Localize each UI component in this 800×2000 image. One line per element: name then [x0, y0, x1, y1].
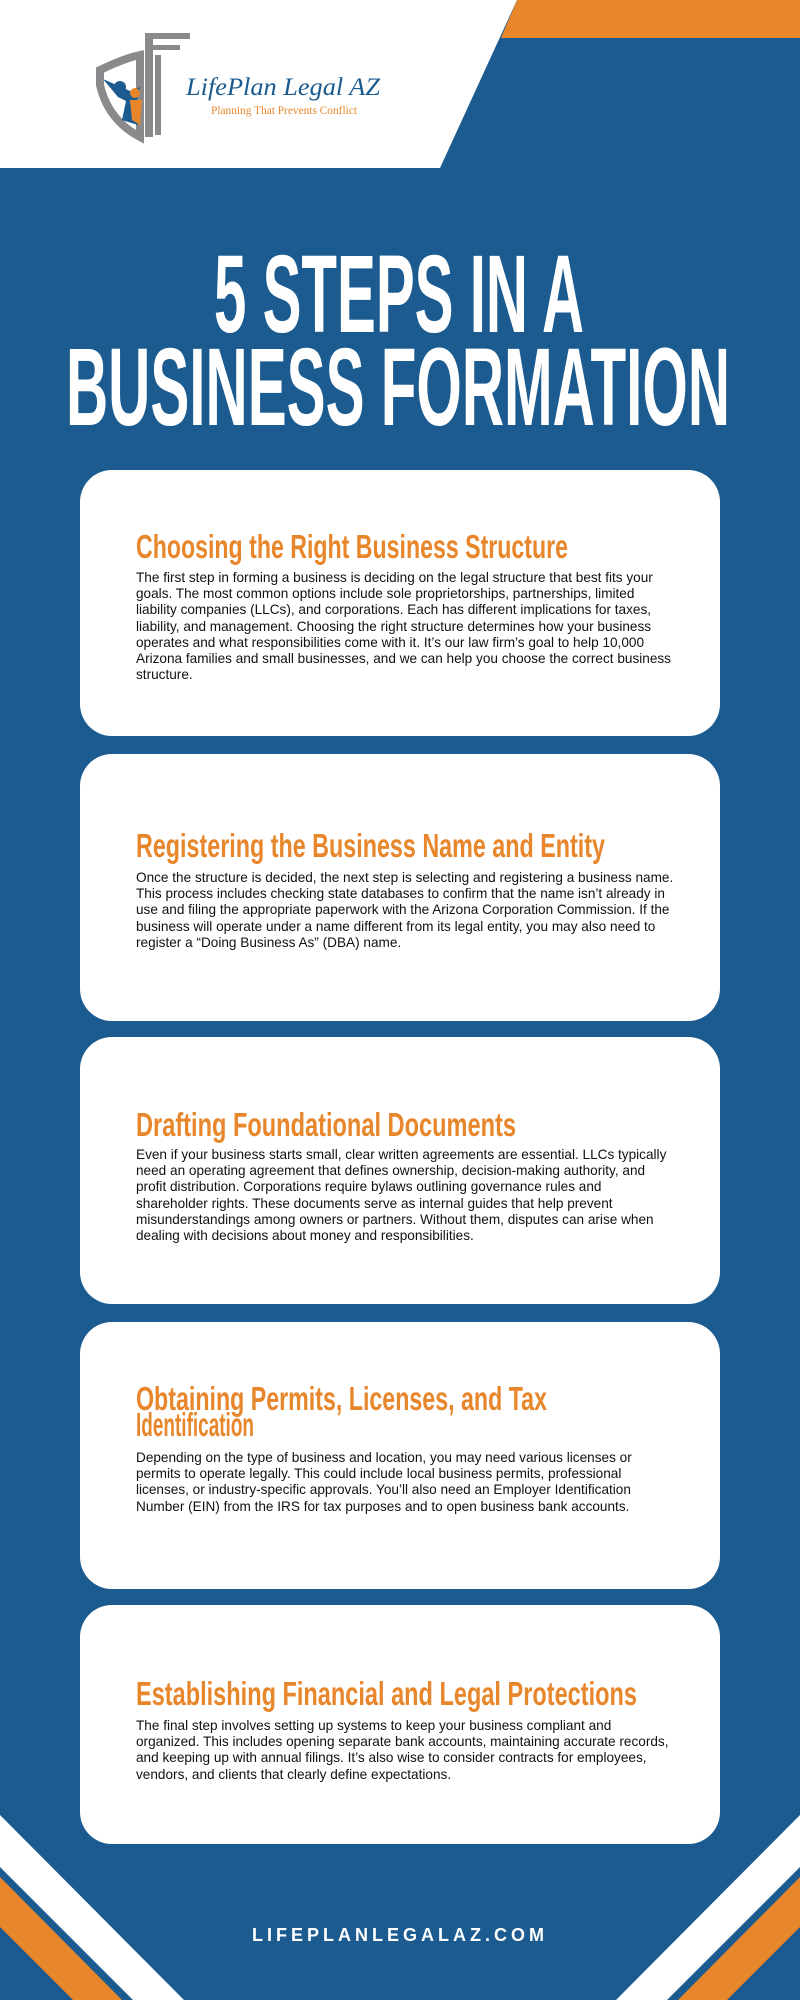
- text 1: The first step in forming a business is deciding on the legal structure that best fits your goals. The most common options include sole proprietorships, partnerships, limited liability companies (LLCs), and corporations. Each has different implications for taxes, liability, and management. Choosing the right structure determines how your business operates and what responsibilities come with it. It’s our law firm’s goal to help 10,000 Arizona families and small businesses, and we can help you choose the correct business structure.: [136, 570, 671, 682]
- panel: step 4: [80, 1322, 720, 1589]
- logo: Planning That Prevents Conflict: [211, 105, 358, 117]
- footer url: LIFEPLANLEGALAZ.COM: [252, 1925, 548, 1945]
- logo text: LifePlan Legal AZ: [185, 74, 381, 101]
- panel: step 5: [80, 1605, 720, 1844]
- heading 4: Identification: [136, 1406, 254, 1443]
- panel: step 1: [80, 470, 720, 736]
- panel: step 3: [80, 1037, 720, 1304]
- heading 4: [136, 1380, 547, 1443]
- text 4: Depending on the type of business and location, you may need various licenses or permits to operate legally. This could include local business permits, professional licenses, or industry-specific approvals. You’ll also need an Employer Identification Number (EIN) from the IRS for tax purposes and to open business bank accounts.: [136, 1450, 632, 1514]
- logo: [96, 33, 381, 144]
- heading 4: Obtaining Permits, Licenses, and Tax: [136, 1380, 547, 1417]
- panel: step 2: [80, 754, 720, 1021]
- text 3: Even if your business starts small, clear written agreements are essential. LLCs typically need an operating agreement that defines ownership, decision-making authority, and profit distribution. Corporations require bylaws outlining governance rules and shareholder rights. These documents serve as internal guides that help prevent misunderstandings among owners or partners. Without them, disputes can arise when dealing with decisions about money and responsibilities.: [136, 1147, 666, 1243]
- icon: shield: [100, 33, 190, 137]
- text 5: The final step involves setting up systems to keep your business compliant and organized. This includes opening separate bank accounts, maintaining accurate records, and keeping up with annual filings. It’s also wise to consider contracts for employees, vendors, and clients that clearly define expectations.: [136, 1718, 668, 1782]
- heading 3: Drafting Foundational Documents: [136, 1106, 516, 1143]
- title: [66, 233, 730, 440]
- text 2: Once the structure is decided, the next step is selecting and registering a business name. This process includes checking state databases to confirm that the name isn’t already in use and filing the appropriate paperwork with the Arizona Corporation Commission. If the business will operate under a name different from its legal entity, you may also need to register a “Doing Business As” (DBA) name.: [136, 870, 673, 950]
